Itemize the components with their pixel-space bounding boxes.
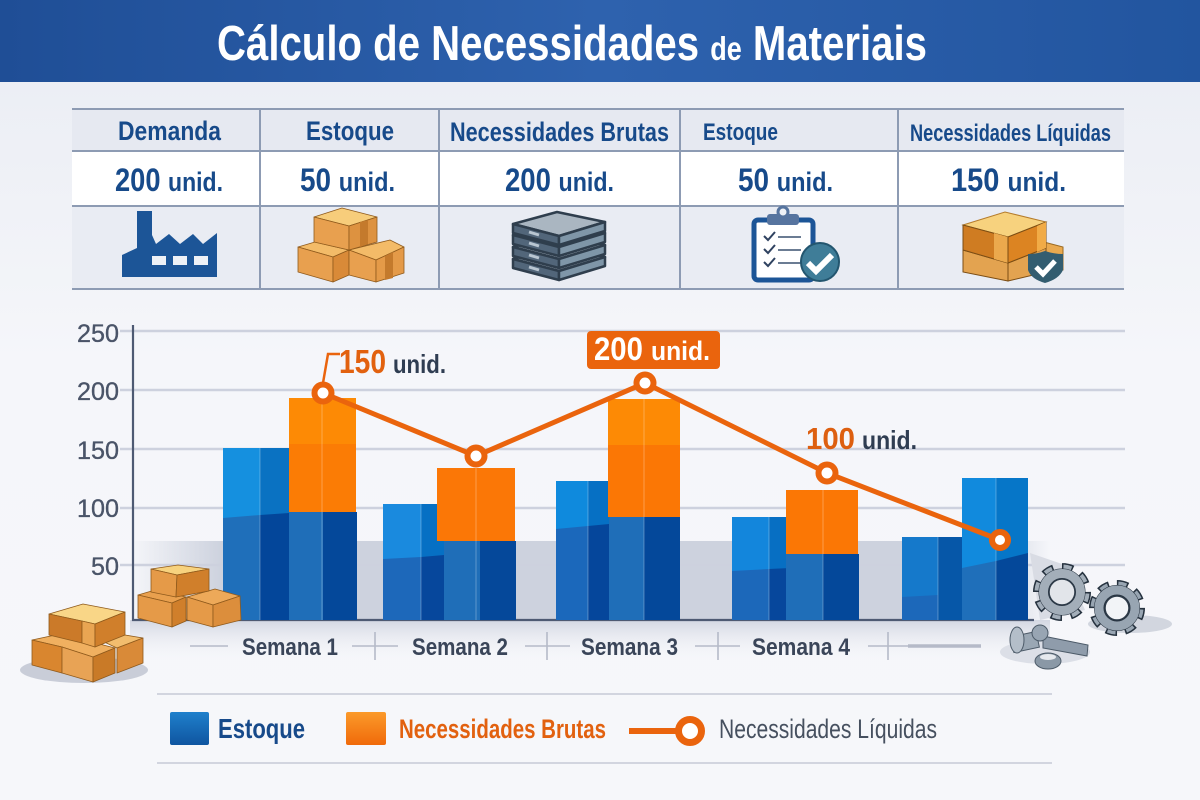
icon: server stack xyxy=(513,212,605,280)
table headers: Necessidades Líquidas xyxy=(910,120,1111,147)
summary table xyxy=(72,109,1124,289)
legend: necessidades brutas xyxy=(346,712,606,745)
title: Cálculo de Necessidades de Materiais xyxy=(217,17,927,71)
table values: 50 unid. xyxy=(738,162,833,198)
y axis labels xyxy=(77,320,119,581)
callout: 100 unid.: 100 xyxy=(806,421,855,456)
x axis labels: Semana 1 xyxy=(242,634,338,661)
chart floor shading xyxy=(130,541,1050,662)
table values xyxy=(115,162,1066,198)
illustration: gears and bolts xyxy=(1000,553,1172,669)
callout: 100 unid.: unid. xyxy=(862,425,917,455)
legend: necessidades líquidas: Necessidades Líquidas xyxy=(719,714,937,744)
icon: boxes with shield xyxy=(963,212,1063,283)
x axis labels xyxy=(190,632,981,661)
y axis labels: 200 xyxy=(77,378,119,406)
y axis labels: 100 xyxy=(77,495,119,523)
table values: 150 unid. xyxy=(951,162,1066,198)
legend xyxy=(157,694,1052,763)
table headers xyxy=(118,116,1111,147)
table headers: Estoque xyxy=(703,119,778,146)
title banner xyxy=(0,0,1200,82)
bars: semana 3 xyxy=(556,399,680,620)
callout: 200 unid.: 200 unid. xyxy=(594,331,710,367)
bars: semana 1 xyxy=(223,398,357,620)
x axis labels: Semana 3 xyxy=(581,634,678,661)
bars: final xyxy=(902,478,1028,620)
chart xyxy=(77,320,1125,662)
table values: 50 unid. xyxy=(300,162,395,198)
y axis labels: 50 xyxy=(91,553,119,581)
callout: 150 unid. xyxy=(323,343,446,383)
table values: 200 unid. xyxy=(115,162,223,198)
y axis labels: 250 xyxy=(77,320,119,348)
table headers: Demanda xyxy=(118,116,222,146)
icon: stacked boxes xyxy=(298,208,404,282)
table headers: Estoque xyxy=(306,116,394,146)
table headers: Necessidades Brutas xyxy=(450,117,669,147)
y axis labels: 150 xyxy=(77,437,119,465)
callout: 100 unid. xyxy=(806,421,917,456)
illustration: small boxes xyxy=(138,565,241,627)
legend: estoque xyxy=(170,712,305,745)
line series: necessidades líquidas xyxy=(314,374,1008,548)
table values: 200 unid. xyxy=(505,162,614,198)
x axis labels: Semana 2 xyxy=(412,634,508,661)
legend: estoque: Estoque xyxy=(218,713,305,744)
x axis labels: Semana 4 xyxy=(752,634,851,661)
legend: necessidades líquidas xyxy=(629,714,937,744)
icon: clipboard with check xyxy=(754,207,839,281)
illustration: large boxes xyxy=(20,604,148,683)
icon: factory xyxy=(122,211,217,277)
legend: necessidades brutas: Necessidades Brutas xyxy=(399,714,606,744)
callout: 150 unid.: 150 xyxy=(339,343,386,380)
callout: 150 unid.: unid. xyxy=(393,349,446,379)
bars: semana 2 xyxy=(383,468,516,620)
bars: semana 4 xyxy=(732,490,859,620)
